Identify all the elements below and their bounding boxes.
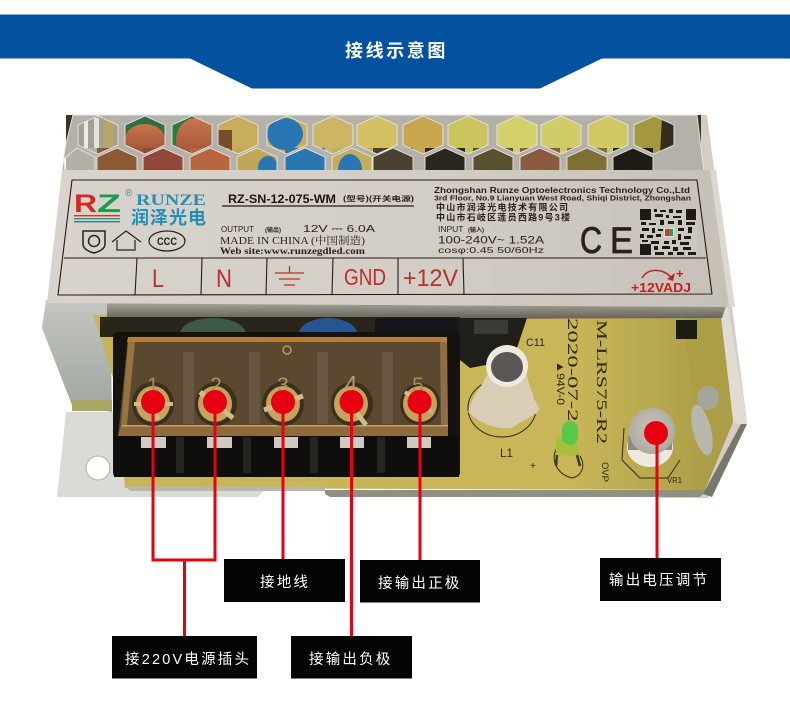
header banner [0, 14, 790, 88]
input specification [438, 224, 545, 255]
label: voltage adjust: 输出电压调节 [609, 572, 709, 589]
board silkscreen text: VR1 [667, 476, 683, 485]
capacitors behind terminal [180, 318, 246, 350]
brand logo: R [74, 190, 97, 218]
input specification: INPUT [438, 224, 464, 234]
banner title: 接线示意图 [345, 40, 448, 61]
inductor L1 with glue [468, 345, 539, 437]
red leader lines [153, 402, 657, 636]
terminal screw 5 [400, 374, 440, 425]
company information: 中山市润泽光电技术有限公司 [436, 202, 568, 212]
label: voltage adjust [600, 558, 721, 601]
label plate right fold [710, 170, 735, 307]
output specification [220, 223, 375, 256]
board silkscreen text: 2020-07-26 [564, 318, 580, 435]
model number: RZ-SN-12-075-WM [228, 192, 336, 206]
label: 220V input: 接220V电源插头 [125, 651, 251, 668]
brand logo: 润泽光电 [131, 207, 206, 228]
metal tabs [141, 437, 431, 448]
terminal screw 4: 4 [345, 371, 358, 397]
board silkscreen text [500, 318, 683, 485]
label: output negative: 接输出负极 [309, 651, 392, 668]
adjust marking: +12VADJ [631, 281, 691, 295]
green LED [554, 421, 583, 478]
adjust marking [631, 266, 691, 295]
output specification: MADE IN CHINA (中国制造) [220, 234, 366, 247]
board silkscreen text: + [530, 461, 536, 472]
label: earth [224, 559, 345, 602]
output specification: 12V ⎓ 6.0A [303, 223, 375, 235]
voltage adjust line [656, 433, 658, 558]
amber cover [118, 337, 448, 436]
brand logo: ® [125, 188, 133, 199]
electrolytic capacitor C11 [458, 318, 527, 368]
label: output positive [360, 560, 480, 602]
adjust marking: + [676, 266, 684, 281]
certification icons: CCC [157, 236, 177, 248]
company information: Zhongshan Runze Optoelectronics Technology Co.,Ltd [434, 185, 690, 195]
output specification: OUTPUT [221, 224, 254, 234]
company information: 中山市石岐区莲员西路9号3楼 [436, 212, 570, 222]
terminal name: L: L [152, 265, 164, 293]
terminal name: earth symbol [275, 266, 304, 285]
terminal screw 2: 2 [210, 374, 222, 397]
label frame lines [58, 180, 712, 295]
terminal screw 3 [262, 374, 304, 426]
circuit board [93, 315, 733, 490]
CE mark: E [610, 220, 633, 261]
left galvanized sheet [42, 300, 112, 412]
input specification: (输入) [468, 226, 484, 234]
label plate: (型号)(开关电源) [343, 194, 414, 203]
terminal name: GND: GND [344, 264, 386, 290]
output specification: Web site:www.runzegdled.com [220, 246, 366, 256]
board silkscreen text: L1 [500, 446, 513, 460]
terminal name: N: N [216, 265, 232, 293]
output positive line [418, 402, 422, 560]
board silkscreen text: M-LRS75-R2 [593, 320, 609, 444]
AC input bracket [153, 402, 215, 636]
terminal screw 4 [331, 371, 373, 426]
terminal screw 1 [132, 374, 174, 426]
terminal screw 3: 3 [277, 374, 289, 397]
label plate [47, 170, 729, 307]
terminal name: +12V: +12V [403, 265, 458, 292]
internals seen through perforation [66, 115, 701, 186]
perforated metal cover [62, 115, 704, 172]
label: output positive: 接输出正极 [378, 575, 462, 592]
company information: 3rd Floor, No.9 Lianyuan West Road, Shiqi District, Zhongshan [434, 196, 691, 202]
board silkscreen text: ▲94V-0 [554, 361, 566, 405]
CE mark [580, 220, 633, 261]
output negative line [350, 402, 353, 636]
terminal block [113, 332, 460, 477]
terminal screw 5: 5 [412, 374, 424, 397]
board silkscreen text: C11 [526, 337, 545, 349]
certification icons [83, 231, 185, 253]
brand logo: Z [97, 190, 121, 218]
shadow band under label [107, 303, 727, 320]
terminal screw 2 [195, 374, 237, 426]
label: earth: 接地线 [260, 574, 310, 591]
input specification: 100-240V~ 1.52A [438, 234, 545, 246]
earth line [282, 402, 284, 559]
brand logo [74, 188, 206, 228]
strip right edge inner [719, 300, 747, 426]
output specification: (输出) [265, 226, 281, 234]
red marker dots [141, 390, 668, 445]
side sheet metal right [660, 115, 747, 498]
company information [434, 185, 691, 222]
bottom metal strip [325, 490, 707, 497]
small diode and components right [676, 320, 697, 339]
label: output negative [291, 636, 412, 678]
brand logo: RUNZE [136, 192, 206, 209]
board silkscreen text: OVP [600, 462, 610, 482]
terminal screw 1: 1 [147, 374, 159, 397]
bottom flange [57, 412, 263, 497]
product photo: power supply [42, 115, 747, 498]
QR code [639, 209, 697, 255]
input specification: cosφ:0.45 50/60Hz [438, 245, 544, 255]
label: 220V input [112, 636, 257, 678]
adjust potentiometer VR1 [622, 408, 680, 478]
CE mark: C [580, 220, 602, 261]
